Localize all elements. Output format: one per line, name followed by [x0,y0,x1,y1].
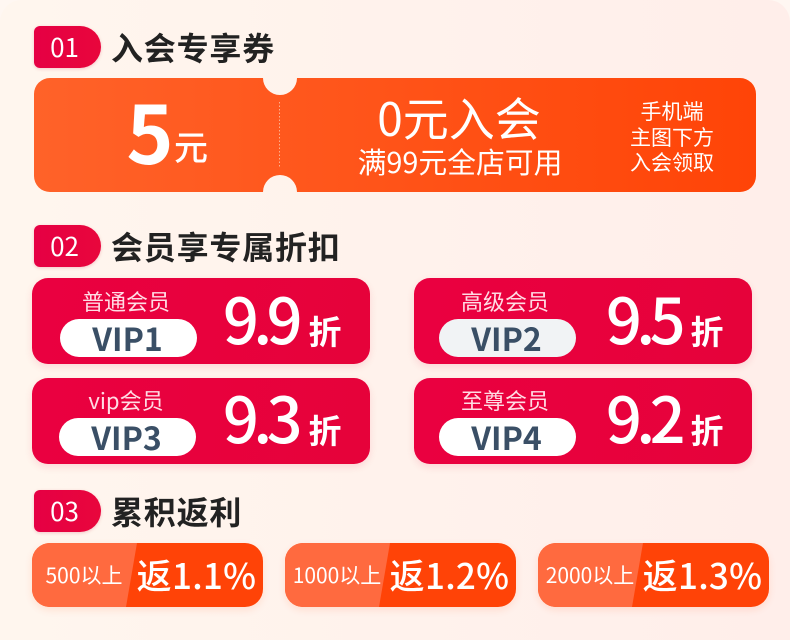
heading: 入会专享券: 入会专享券 [111,24,275,70]
coupon condition: 满99元全店可用 [358,141,562,182]
discount value: 9.9 [223,272,297,363]
light slanted panel [285,543,390,607]
coupon background [34,78,756,192]
coupon ticket [34,72,756,192]
rebate: 2000以上 [538,543,769,607]
discount unit: 折 [690,306,724,354]
threshold: 1000以上 [293,560,381,590]
pill VIP3 [59,418,196,456]
rebate: 500以上 [32,543,263,607]
digit 5: 5 [126,72,174,188]
discount unit: 折 [308,306,342,354]
coupon note: 入会领取 [630,147,714,177]
discount value: 9.3 [223,371,297,462]
coupon title: 0元入会: 0元入会 [377,84,541,150]
section tag 01: 01 [50,28,79,65]
member label: 普通会员 [82,285,170,317]
card: VIP4 [414,378,752,464]
section tag 03: 03 [50,492,79,529]
heading: 会员享专属折扣: 会员享专属折扣 [111,223,341,269]
pill VIP1: VIP1 [92,315,163,361]
rebate value: 返1.2% [390,549,509,600]
threshold: 500以上 [46,560,122,590]
pill VIP4 [439,418,576,456]
card: VIP2 [414,278,752,364]
coupon note: 手机端 [640,96,704,126]
pill VIP1 [60,319,197,357]
member label: vip会员 [88,384,164,416]
light slanted panel [32,543,137,607]
rebate value: 返1.3% [643,549,762,600]
coupon note: 主图下方 [630,122,714,152]
section tag 02 [34,225,101,267]
section tag 03 [34,490,101,532]
pill VIP2: VIP2 [471,315,542,361]
card: VIP3 [32,378,370,464]
discount unit: 折 [308,405,342,453]
member label: 高级会员 [461,285,549,317]
pill VIP4: VIP4 [471,414,542,460]
light slanted panel [538,543,643,607]
coupon note [630,96,714,177]
discount value: 9.2 [606,371,680,462]
rebate value: 返1.1% [137,549,256,600]
unit 元: 元 [174,121,208,170]
pill VIP2 [439,319,576,357]
heading: 累积返利: 累积返利 [111,488,242,534]
pill VIP3: VIP3 [91,414,162,460]
section tag 01 [34,26,101,68]
discount unit: 折 [690,405,724,453]
card: VIP1 [32,278,370,364]
coupon value: 5元 [126,72,208,188]
member label: 至尊会员 [461,384,549,416]
rebate: 1000以上 [285,543,516,607]
discount value: 9.5 [606,272,680,363]
threshold: 2000以上 [546,560,634,590]
section tag 02: 02 [50,227,79,264]
